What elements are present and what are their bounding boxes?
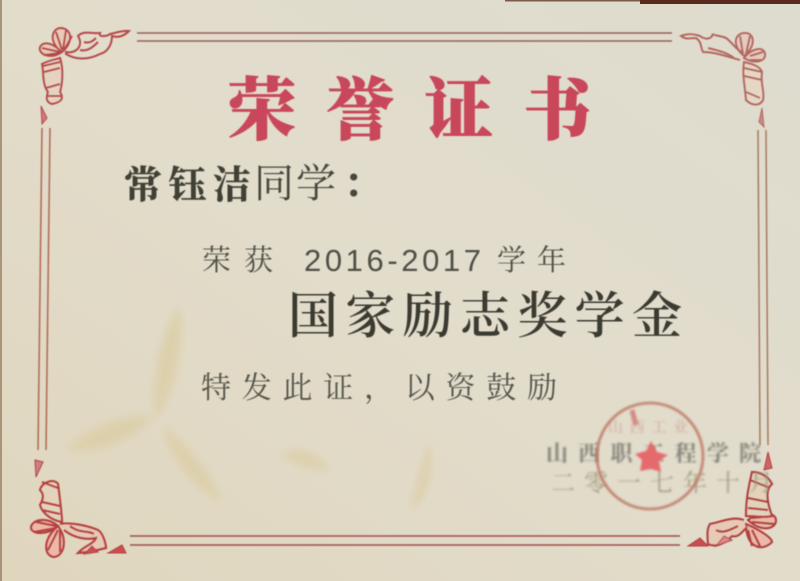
- recipient name: [124, 161, 383, 207]
- scholarship name: 国家励志奖学金: [288, 288, 682, 344]
- recipient name: ：: [343, 161, 383, 206]
- corner ornament: top right: [681, 33, 765, 127]
- recipient name: 常钰洁: [124, 165, 251, 207]
- border: bottom double rule: [130, 536, 680, 545]
- issue date: 二零一七年十月: [551, 470, 773, 497]
- border: top double rule: [137, 33, 672, 41]
- official seal: [597, 403, 703, 509]
- closing line: 特发此证，以资鼓励: [201, 372, 557, 405]
- title: 荣誉证书: [228, 73, 594, 149]
- recipient name: 同学: [254, 161, 336, 206]
- corner ornament: bottom left: [31, 460, 126, 557]
- official seal: 山西工业: [608, 419, 688, 436]
- issuing school: 山西职工程学院: [546, 441, 761, 466]
- award year line: 荣获: [202, 244, 273, 277]
- border: right double rule: [758, 130, 768, 445]
- award year line: 2016-2017: [304, 243, 481, 278]
- award year line: 学年: [497, 244, 566, 277]
- border: left double rule: [38, 128, 50, 450]
- award year line: [202, 243, 566, 278]
- corner ornament: bottom right: [688, 452, 776, 547]
- background leaf watermark: [66, 305, 431, 510]
- corner ornament: top left: [40, 28, 129, 124]
